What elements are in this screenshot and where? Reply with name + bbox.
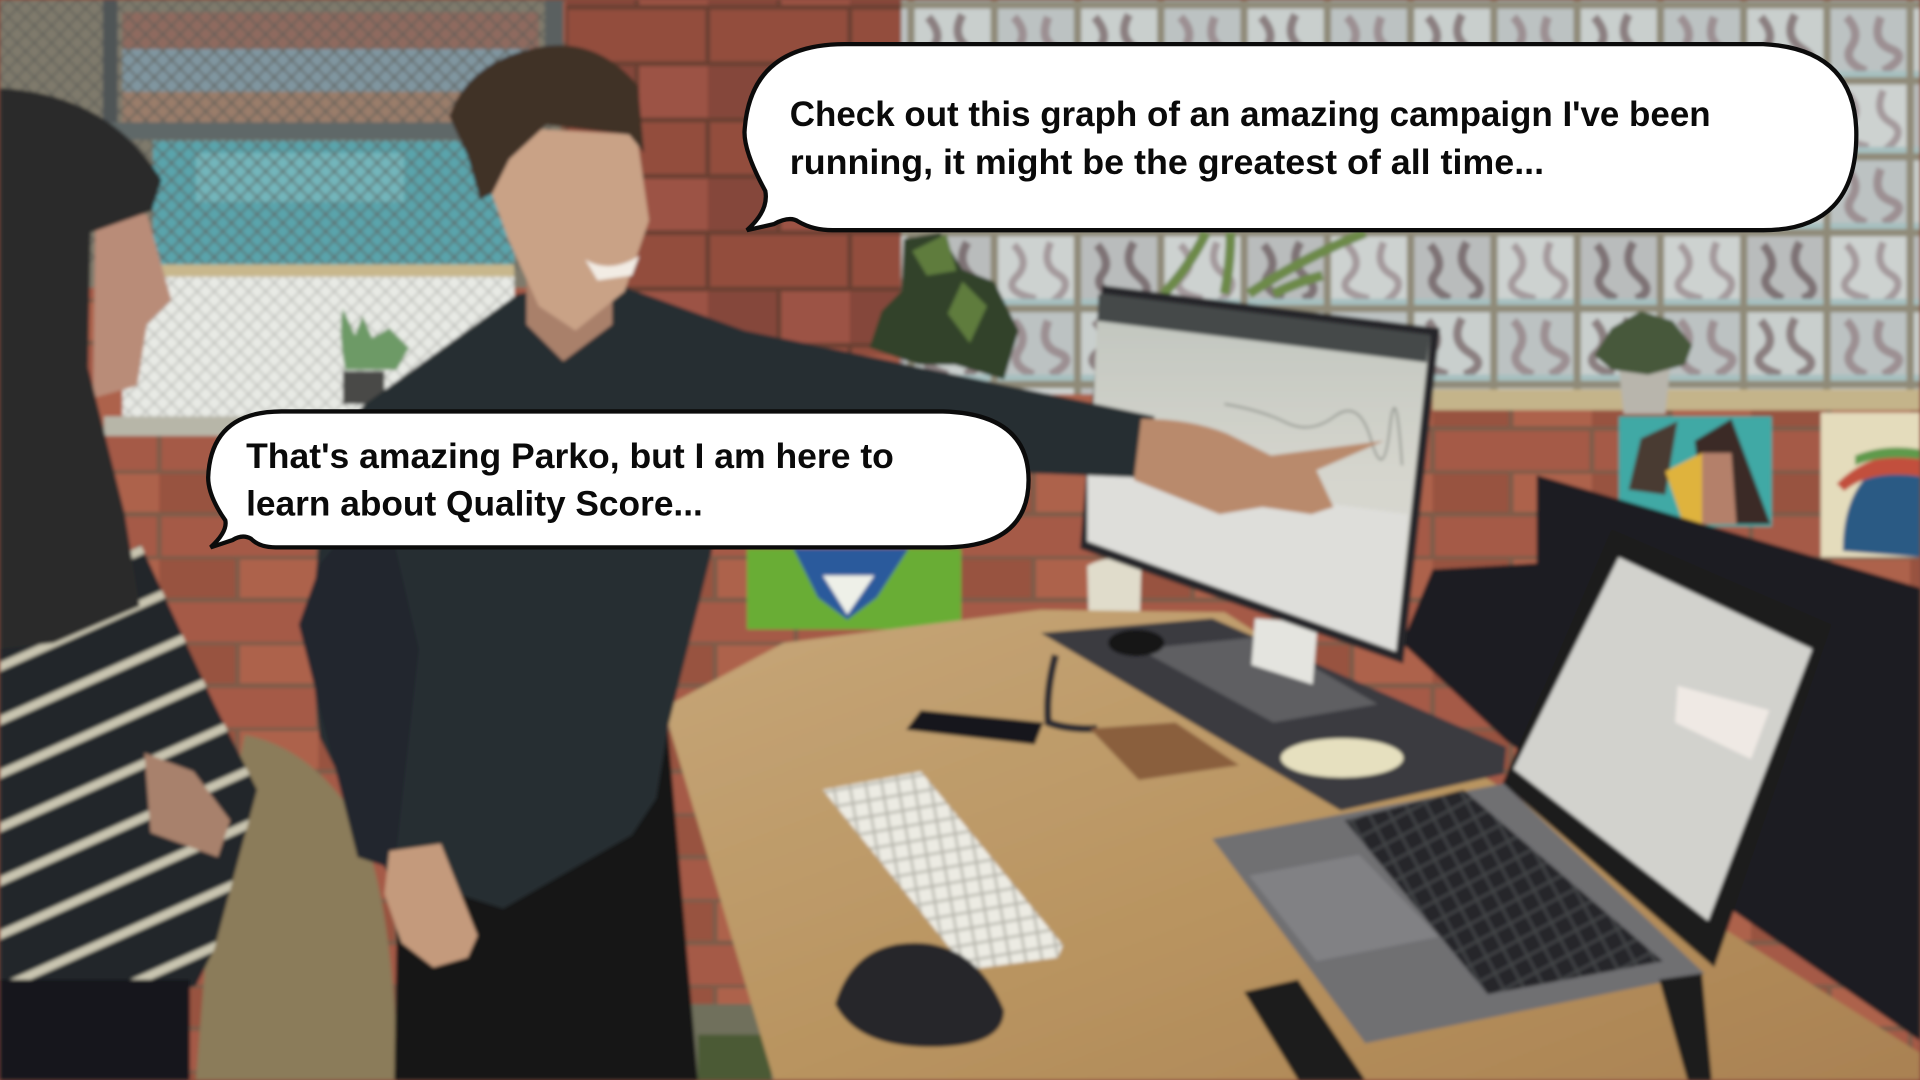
black trousers: [0, 980, 190, 1080]
man: [299, 45, 1384, 1080]
speech text: man: Check out this graph of an amazing campaign I've been: [790, 94, 1711, 134]
potted plant on sill: [1594, 311, 1692, 414]
brick pillar: [566, 0, 901, 355]
trousers: [394, 722, 698, 1080]
woman: [0, 88, 257, 1080]
window sill: [1433, 389, 1920, 410]
black computer mouse: [835, 943, 1004, 1047]
speech text: man: [790, 94, 1711, 182]
speech text: woman: [246, 436, 894, 524]
large monitor showing graph: [1080, 285, 1440, 664]
woman's hand: [144, 753, 230, 857]
speech bubble: woman: [208, 411, 1029, 547]
speech text: man: running, it might be the greatest of all time...: [790, 142, 1544, 182]
speech text: woman: That's amazing Parko, but I am here to: [246, 436, 894, 476]
desk: [664, 610, 1920, 1080]
painting: face on wall: [1619, 416, 1772, 527]
woman's jacket on chair: [196, 735, 398, 1080]
striped sweater: [0, 545, 257, 1041]
laptop: [1212, 529, 1832, 1080]
lower wall and floor: [514, 1004, 778, 1080]
hair: [449, 45, 644, 200]
speech text: woman: learn about Quality Score...: [246, 484, 703, 524]
speech bubble: man: [744, 44, 1856, 230]
white keyboard: [823, 771, 1063, 970]
neck: [527, 263, 612, 361]
shelf stand: [1041, 618, 1506, 811]
face: [93, 214, 171, 398]
painting: green tiger: [747, 549, 961, 629]
small window plant: [341, 309, 409, 404]
hair: [0, 88, 162, 649]
book: [1090, 722, 1239, 780]
white magic mouse: [1281, 738, 1403, 778]
window with chain link: [0, 0, 563, 436]
phone: [906, 710, 1043, 744]
painting: colourful on wall: [1821, 413, 1920, 557]
leafy plant: [869, 233, 1365, 380]
shirt torso and arm: [310, 282, 1155, 909]
dark monitor on right: [1537, 475, 1920, 1041]
lower hand: [384, 844, 478, 967]
water bottle: [1087, 558, 1141, 705]
glass block wall: [900, 0, 1920, 394]
face: [484, 129, 649, 331]
pointing hand: [1134, 419, 1384, 514]
clutter and dark desk behind: [1402, 563, 1920, 1041]
